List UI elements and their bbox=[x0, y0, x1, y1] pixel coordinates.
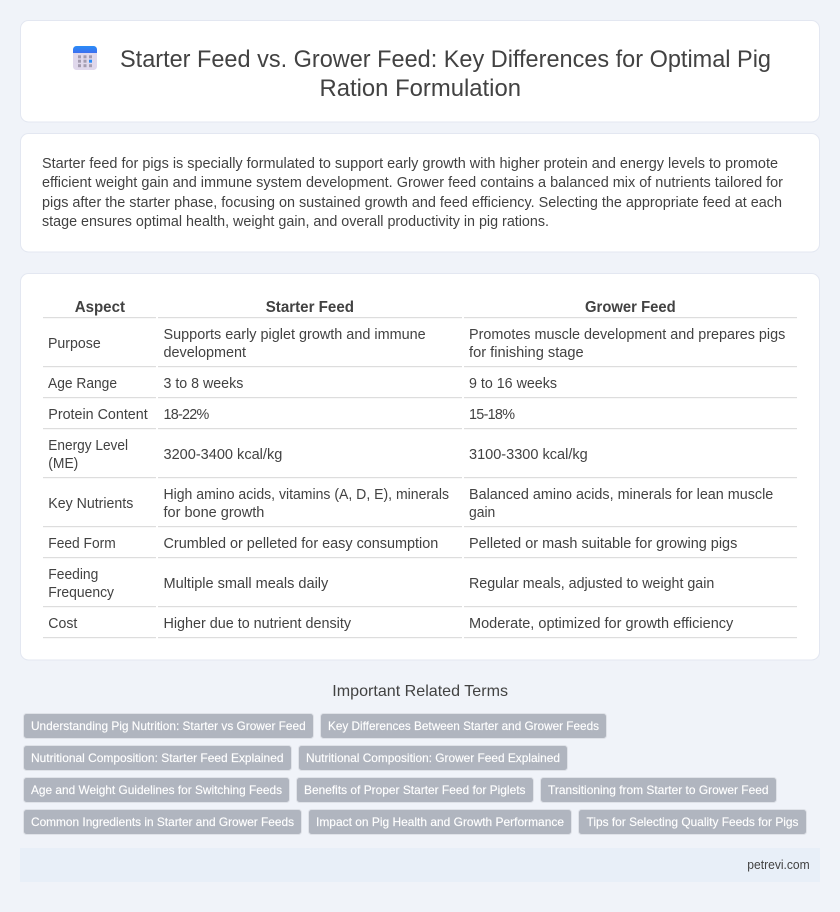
table header row bbox=[43, 299, 797, 318]
row: feed form bbox=[43, 536, 797, 558]
row: key nutrients: for bone growth bbox=[164, 505, 264, 521]
row: feed form: Crumbled or pelleted for easy consumption bbox=[164, 536, 438, 552]
row: purpose: Purpose bbox=[48, 336, 101, 352]
row: cost: Higher due to nutrient density bbox=[164, 616, 352, 632]
icon: calendar bbox=[73, 46, 97, 70]
table header row: Starter Feed bbox=[266, 299, 354, 316]
row: energy level: 3200-3400 kcal/kg bbox=[164, 447, 282, 463]
row: cost bbox=[43, 616, 797, 638]
row: energy level: Energy Level bbox=[48, 438, 128, 454]
tag: Understanding Pig Nutrition: Starter vs Grower Feed bbox=[31, 719, 306, 733]
tag bbox=[24, 810, 302, 834]
row: age range: 3 to 8 weeks bbox=[164, 376, 243, 392]
tag: Tips for Selecting Quality Feeds for Pigs bbox=[586, 815, 798, 829]
text block: description: stage ensures optimal health, weight gain, and overall productivity in pig rations. bbox=[42, 214, 549, 230]
row: purpose bbox=[43, 327, 797, 367]
row: purpose: for finishing stage bbox=[469, 345, 584, 361]
row: purpose: Promotes muscle development and prepares pigs bbox=[469, 327, 785, 343]
tag bbox=[540, 778, 776, 802]
panel: description bbox=[20, 134, 820, 252]
text block: description: efficient weight gain and immune system development. Grower feed contains a balanced mix of nutrients tailored for bbox=[42, 175, 783, 191]
row: age range bbox=[43, 376, 797, 398]
row: key nutrients: High amino acids, vitamins (A, D, E), minerals bbox=[164, 487, 449, 503]
row: feeding frequency: Feeding bbox=[48, 567, 98, 583]
row: protein content: Protein Content bbox=[48, 407, 148, 423]
row: feed form: Feed Form bbox=[48, 536, 116, 552]
tag bbox=[24, 778, 290, 802]
table header row: Aspect bbox=[75, 299, 126, 316]
row: energy level: 3100-3300 kcal/kg bbox=[469, 447, 588, 463]
row: protein content: 18-22% bbox=[164, 407, 210, 423]
title: Ration Formulation bbox=[320, 75, 521, 102]
tag bbox=[24, 746, 292, 770]
row: protein content bbox=[43, 407, 797, 429]
tag: Common Ingredients in Starter and Grower Feeds bbox=[31, 815, 294, 829]
heading: important related terms: Important Related Terms bbox=[332, 683, 508, 700]
row: purpose: development bbox=[164, 345, 246, 361]
row: feeding frequency: Regular meals, adjusted to weight gain bbox=[469, 576, 714, 592]
row: energy level bbox=[43, 438, 797, 478]
tag: Age and Weight Guidelines for Switching Feeds bbox=[31, 783, 282, 797]
tag: Benefits of Proper Starter Feed for Piglets bbox=[304, 783, 526, 797]
tag bbox=[296, 778, 534, 802]
tag: Nutritional Composition: Grower Feed Explained bbox=[306, 751, 560, 765]
tag: Nutritional Composition: Starter Feed Explained bbox=[31, 751, 284, 765]
row: age range: 9 to 16 weeks bbox=[469, 376, 557, 392]
row: cost: Cost bbox=[48, 616, 77, 632]
row: key nutrients bbox=[43, 487, 797, 527]
table header row: Grower Feed bbox=[585, 299, 676, 316]
tag bbox=[24, 714, 314, 738]
title: Starter Feed vs. Grower Feed: Key Differences for Optimal Pig bbox=[120, 46, 771, 73]
tag bbox=[578, 810, 806, 834]
row: protein content: 15-18% bbox=[469, 407, 515, 423]
title bbox=[120, 46, 771, 102]
tag: Transitioning from Starter to Grower Feed bbox=[548, 783, 768, 797]
tag list: related terms bbox=[24, 714, 806, 834]
row: purpose: Supports early piglet growth and immune bbox=[164, 327, 426, 343]
row: cost: Moderate, optimized for growth efficiency bbox=[469, 616, 734, 632]
footer source text: petrevi.com bbox=[747, 857, 810, 872]
panel: title header bbox=[20, 20, 820, 122]
tag bbox=[298, 746, 568, 770]
row: key nutrients: Balanced amino acids, minerals for lean muscle bbox=[469, 487, 773, 503]
tag bbox=[308, 810, 572, 834]
row: feeding frequency: Multiple small meals daily bbox=[164, 576, 329, 592]
text block: description: pigs after the starter phase, focusing on sustained growth and feed efficiency. Selecting the appropriate feed at each bbox=[42, 195, 782, 211]
row: energy level: (ME) bbox=[48, 456, 78, 472]
row: feeding frequency bbox=[43, 567, 797, 607]
row: feeding frequency: Frequency bbox=[48, 585, 115, 601]
row: key nutrients: Key Nutrients bbox=[48, 496, 133, 512]
footer bbox=[20, 848, 820, 882]
row: feed form: Pelleted or mash suitable for growing pigs bbox=[469, 536, 737, 552]
text block: description: Starter feed for pigs is specially formulated to support early growth with higher protein and energy levels to promote bbox=[42, 156, 778, 172]
tag: Impact on Pig Health and Growth Performance bbox=[316, 815, 564, 829]
text block: description bbox=[42, 156, 783, 230]
row: key nutrients: gain bbox=[469, 505, 495, 521]
tag: Key Differences Between Starter and Grower Feeds bbox=[328, 719, 599, 733]
panel: comparison table bbox=[20, 274, 820, 660]
tag bbox=[320, 714, 606, 738]
row: age range: Age Range bbox=[48, 376, 117, 392]
